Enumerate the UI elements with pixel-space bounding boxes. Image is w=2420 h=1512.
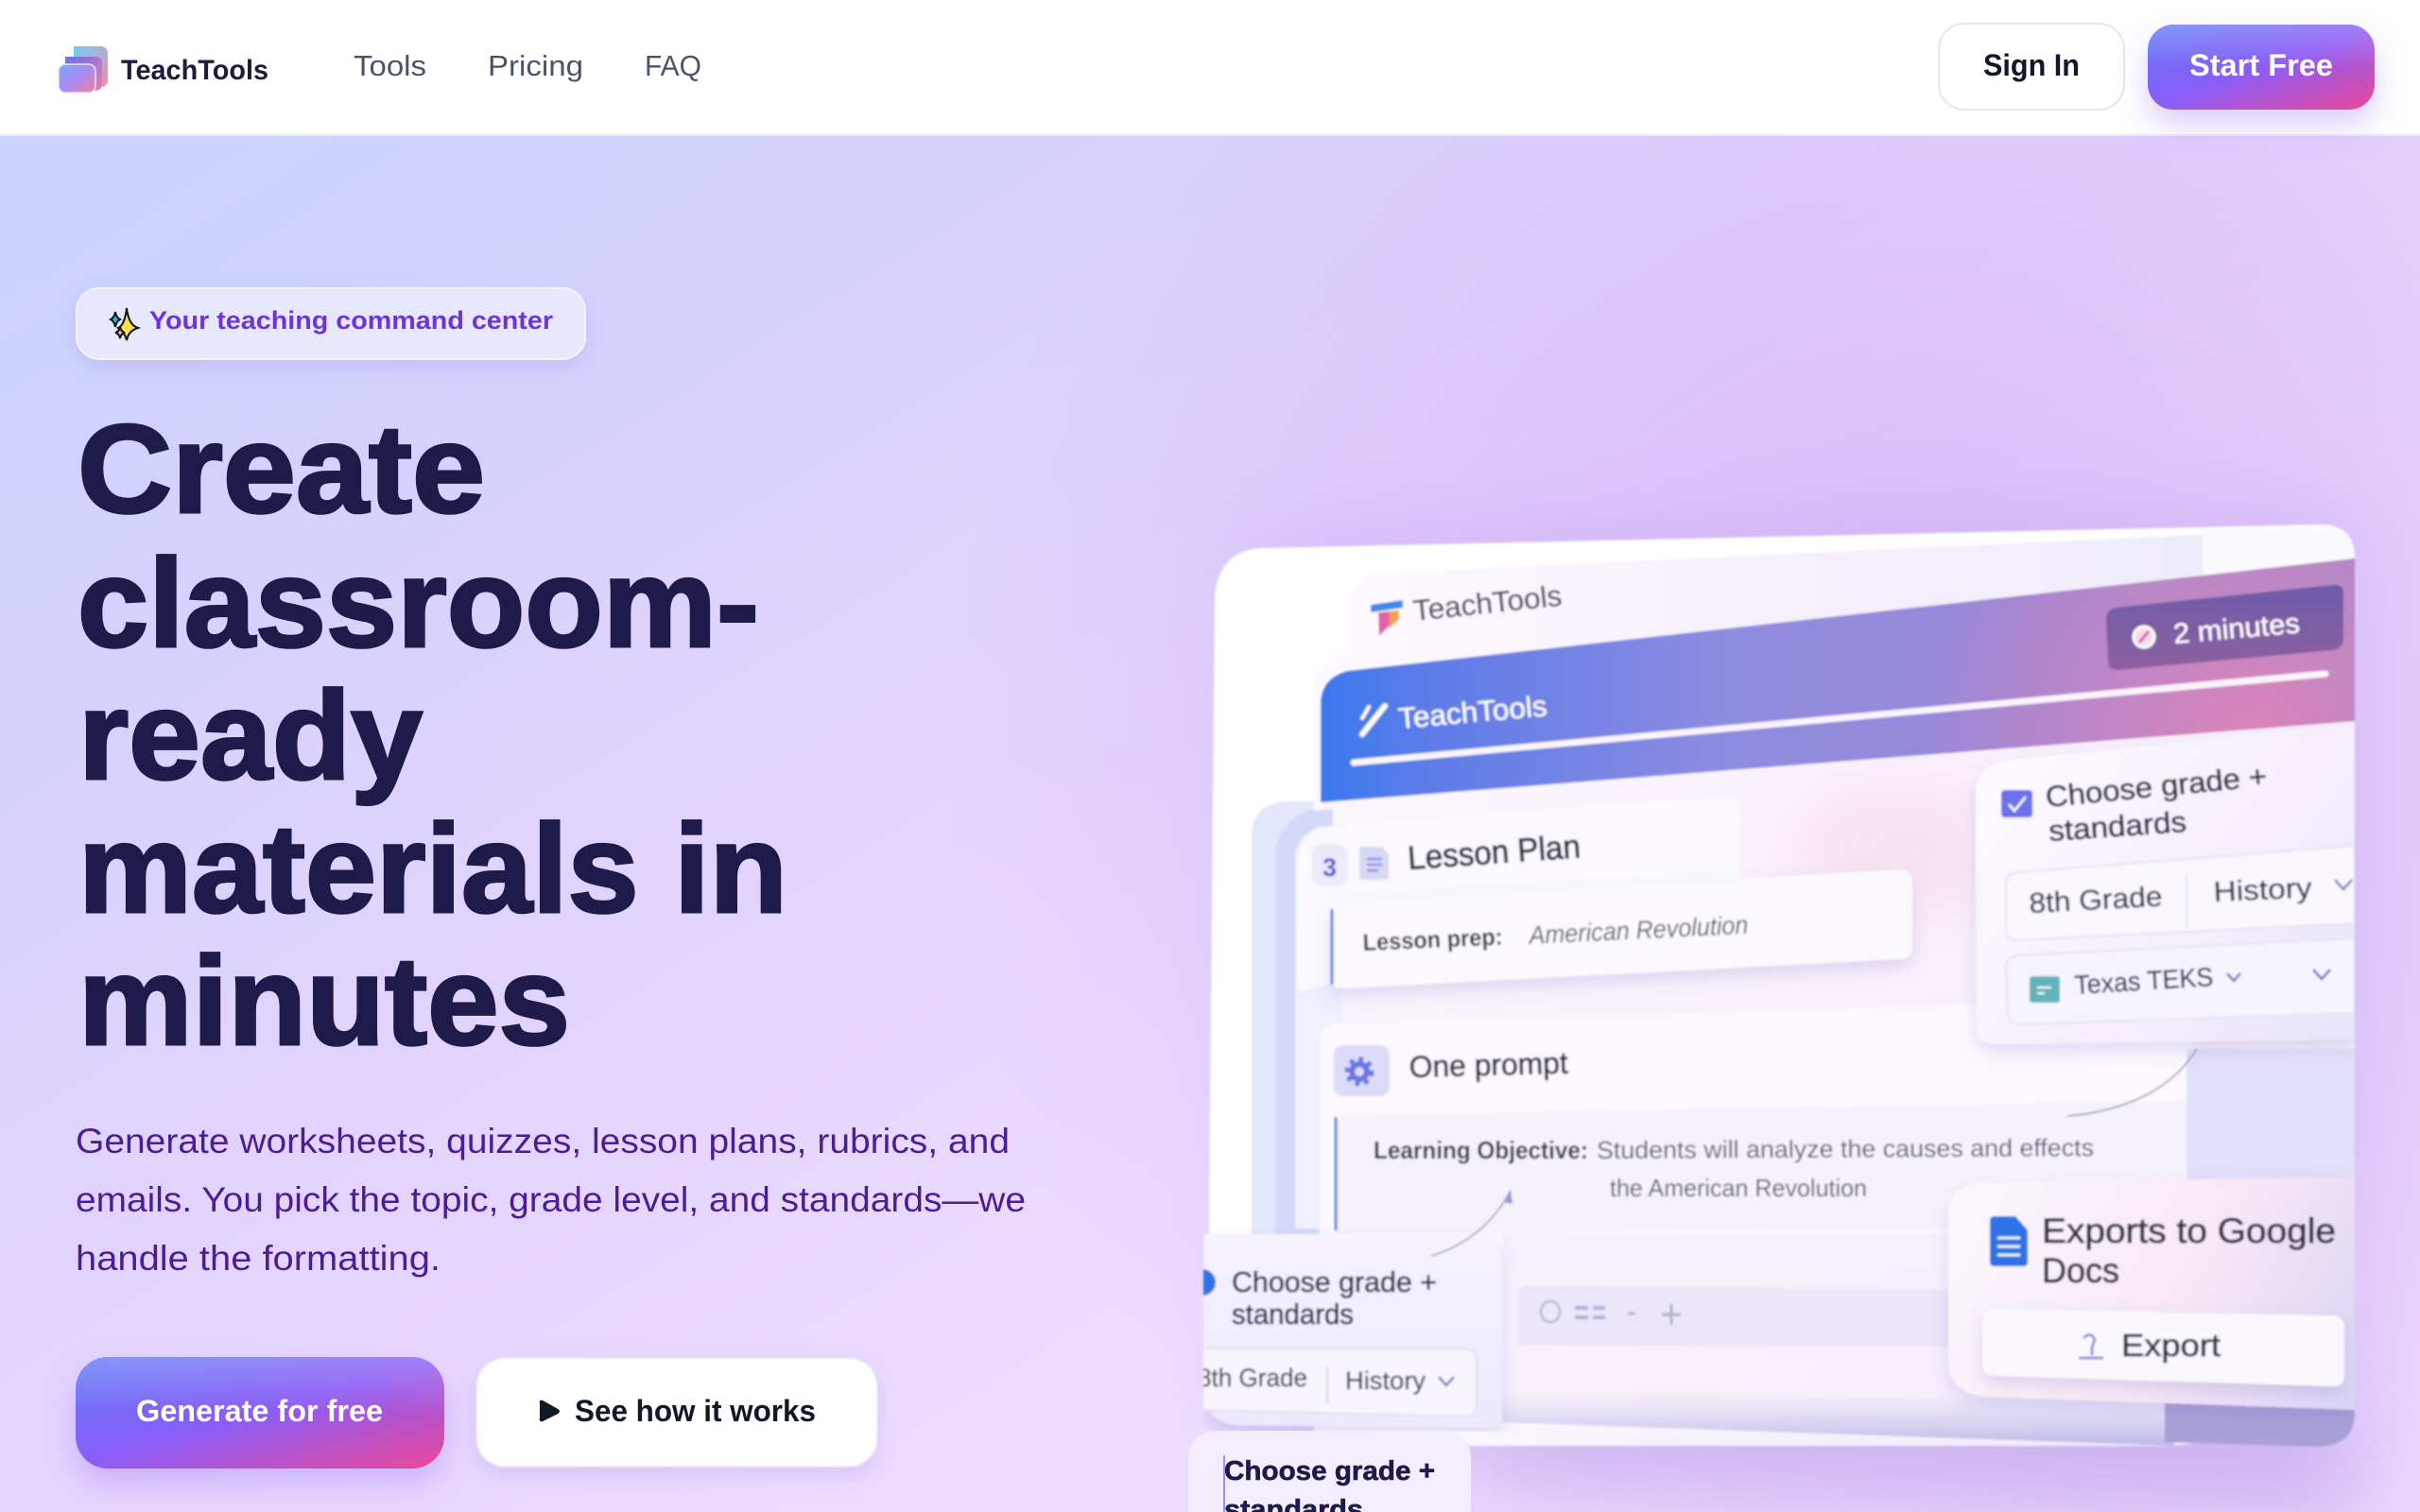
mock grade selection card: standards (2048, 805, 2187, 848)
icon: play (541, 1401, 559, 1420)
generate for free button: Generate for free (136, 1394, 383, 1428)
mock header brand text: TeachTools (1411, 579, 1564, 627)
bottom floating card (1188, 1431, 1471, 1512)
mock grade dropdown: History (2213, 872, 2312, 908)
mock small logo (1371, 600, 1403, 636)
mock checkbox (2001, 790, 2032, 817)
icon: sparkles (111, 308, 138, 340)
logo icon (59, 46, 108, 93)
mock progress line (1354, 674, 2325, 763)
mock left lavender strips (1252, 801, 1314, 1234)
subheading paragraph: Generate worksheets, quizzes, lesson plans, rubrics, and (76, 1122, 1010, 1160)
sign in button: Sign In (1983, 48, 2080, 82)
mock grade selection card (1976, 724, 2355, 1044)
headline: materials in (78, 799, 787, 939)
mock window sheet (1312, 535, 2203, 1447)
subheading paragraph (76, 1122, 1026, 1278)
mock exports card: Exports to Google (2042, 1211, 2336, 1250)
mock lower lines (1502, 1233, 1966, 1266)
badge text: Your teaching command center (149, 306, 554, 335)
mock doc icon (1359, 847, 1389, 880)
mock pencil icon (1362, 706, 1385, 734)
mock timer pill (2106, 585, 2343, 670)
mock one prompt card: One prompt (1409, 1046, 1568, 1084)
mock lower left dropdown: 8th Grade (1198, 1364, 1307, 1392)
mock lesson prep card (1331, 869, 1912, 988)
mock objective box: Learning Objective: (1374, 1136, 1588, 1164)
badge (77, 288, 585, 359)
mock lower left card (1189, 1234, 1502, 1428)
mock standards dropdown: Texas TEKS (2073, 962, 2214, 1000)
see how it works button: See how it works (575, 1394, 816, 1428)
bottom floating card: Choose grade + (1224, 1456, 1435, 1486)
mock lower left card: Choose grade + (1232, 1265, 1437, 1298)
mock grade selection card: Choose grade + (2044, 760, 2269, 814)
mock arrow lower (1431, 1191, 1511, 1256)
mock bright top corner (2203, 536, 2354, 576)
navigation bar (0, 0, 2420, 136)
mock export button: Export (2121, 1328, 2221, 1363)
generate for free button (76, 1357, 444, 1469)
sign in button (1939, 24, 2124, 110)
mock pane body (2142, 726, 2312, 744)
mock lower left dropdown: History (1345, 1366, 1426, 1395)
headline: classroom- (78, 534, 759, 674)
nav links: Pricing (488, 49, 583, 82)
mock grade dropdown: 8th Grade (2029, 882, 2163, 919)
headline (78, 400, 787, 1072)
headline: Create (78, 400, 485, 540)
mock export button (1982, 1309, 2344, 1386)
mock exports card: Docs (2042, 1251, 2119, 1290)
mock right bottom shade (2165, 1399, 2355, 1447)
mock gradient header: TeachTools (1397, 689, 1548, 735)
mock arrow upper (2067, 1049, 2197, 1116)
mock header brand text (1371, 579, 1564, 636)
mock objective box: the American Revolution (1610, 1174, 1867, 1202)
mock timer pill: 2 minutes (2172, 608, 2301, 650)
mock lesson prep card: American Revolution (1527, 911, 1749, 950)
subheading paragraph: emails. You pick the topic, grade level, and standards—we (76, 1180, 1026, 1219)
mock gradient header (1321, 558, 2355, 802)
mock arrowhead lower (1503, 1189, 1512, 1204)
mock lesson plan stack: Lesson Plan (1407, 828, 1582, 877)
mock grade dropdown (2006, 846, 2355, 940)
headline: minutes (78, 932, 570, 1072)
mock gear icon (1334, 1045, 1390, 1096)
see how it works button (476, 1358, 877, 1467)
mockup outer frame (1207, 524, 2355, 1447)
mock lower shading (1502, 1389, 2174, 1446)
mock editor toolbar (1518, 1285, 1957, 1347)
nav links (354, 49, 701, 82)
mock lower left card: standards (1232, 1297, 1354, 1331)
start free button: Start Free (2189, 48, 2333, 82)
nav links: FAQ (645, 49, 701, 82)
nav links: Tools (354, 49, 426, 82)
hero floor shadow (1475, 1418, 2354, 1503)
logo wordmark: TeachTools (121, 55, 268, 86)
icon: google docs (1990, 1216, 2028, 1266)
mock pink wash (1804, 795, 1974, 905)
headline: ready (78, 666, 423, 806)
mock lesson prep card: Lesson prep: (1362, 924, 1503, 956)
mock lower left dropdown (1198, 1349, 1477, 1417)
mock lesson plan stack: 3 (1322, 853, 1337, 882)
mock standards dropdown (2006, 938, 2355, 1024)
product mockup (1189, 524, 2355, 1447)
mock lesson plan stack (1275, 797, 1739, 1257)
subheading paragraph: handle the formatting. (76, 1239, 441, 1278)
mock objective box: Students will analyze the causes and effects (1597, 1133, 2094, 1164)
mock objective box (1335, 1101, 2187, 1233)
start free button (2148, 25, 2375, 110)
mock glow background (1257, 520, 2354, 1474)
mock blue dot (1189, 1269, 1216, 1296)
mock one prompt card (1320, 998, 2355, 1247)
mock exports card (1948, 1177, 2355, 1410)
